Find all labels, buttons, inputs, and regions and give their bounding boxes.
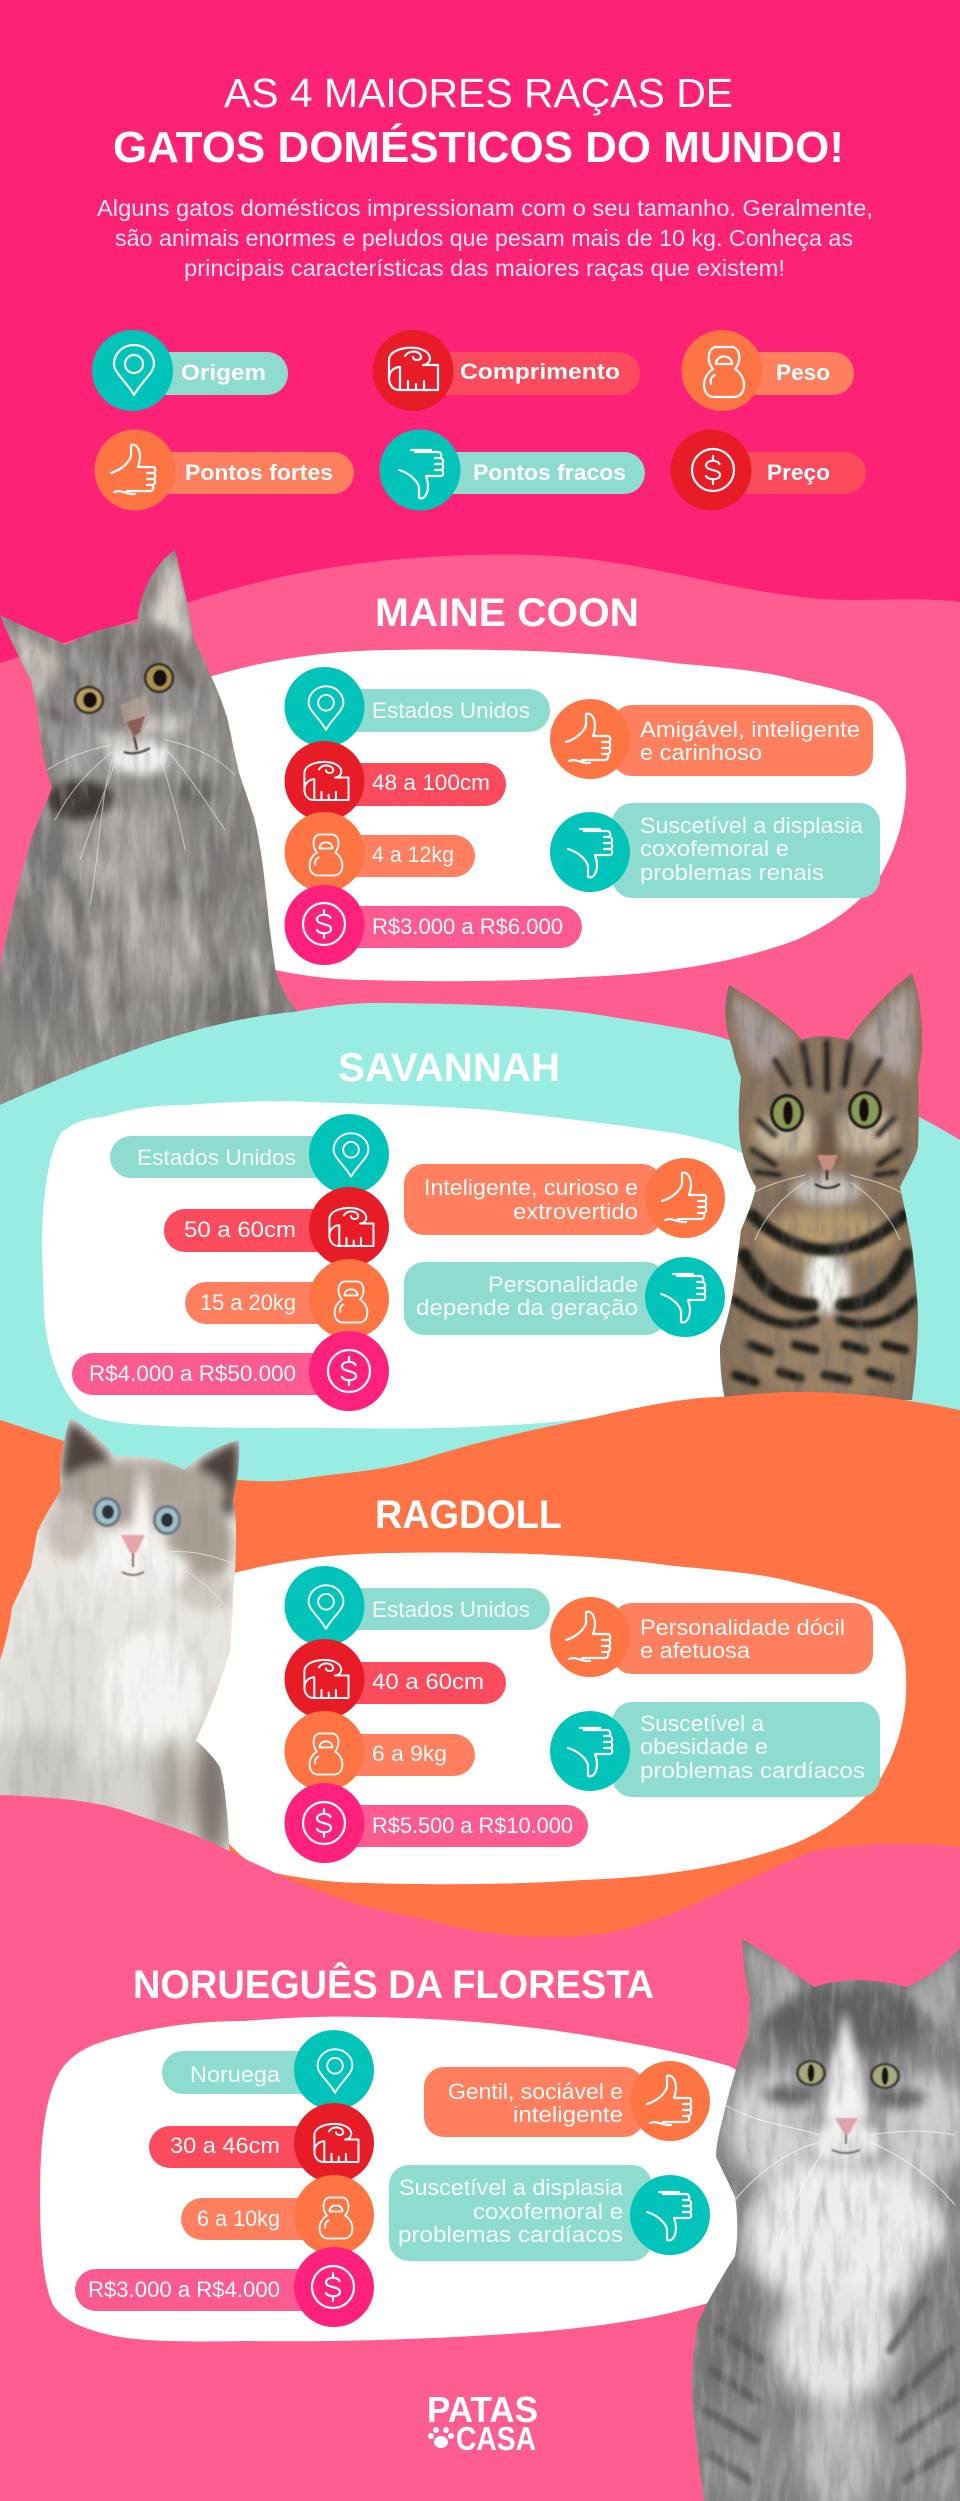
comprimento row: 40 a 60cm xyxy=(372,1669,484,1694)
intro paragraph xyxy=(97,195,873,281)
legend: origem xyxy=(92,330,288,411)
peso row xyxy=(284,812,475,892)
pontos fracos: Suscetível a displasia xyxy=(640,813,864,838)
icon: paw xyxy=(428,2427,454,2448)
white panel: Ragdoll xyxy=(190,1553,906,1884)
pontos fracos xyxy=(389,2165,710,2261)
pontos fracos: coxofemoral e xyxy=(640,836,789,861)
legend: comprimento xyxy=(372,330,640,411)
panel content: Norueguês da Floresta xyxy=(75,1961,710,2327)
title xyxy=(113,70,844,172)
pontos fracos: problemas cardíacos xyxy=(398,2222,623,2247)
logo: Patas da Casa: PATAS xyxy=(427,2389,538,2430)
legend: origem: Origem xyxy=(181,360,266,385)
white panel: Savannah xyxy=(42,1101,793,1428)
pontos fortes: Amigável, inteligente xyxy=(640,717,860,742)
intro paragraph: principais características das maiores raças que existem! xyxy=(184,255,785,281)
peso row xyxy=(185,1259,389,1339)
pontos fortes: e carinhoso xyxy=(640,740,762,765)
comprimento row xyxy=(284,1639,506,1719)
pontos fracos: Suscetível a xyxy=(640,1711,765,1736)
pontos fortes xyxy=(424,2061,710,2141)
background wave: Maine Coon section xyxy=(0,555,960,1200)
pontos fortes xyxy=(550,699,873,779)
photo: Savannah cat xyxy=(720,973,922,1400)
origem row: Noruega xyxy=(190,2062,281,2087)
comprimento row xyxy=(164,1187,389,1267)
legend: pontos fracos: Pontos fracos xyxy=(473,460,626,485)
heading: Maine Coon: MAINE COON xyxy=(375,591,639,635)
heading: Norueguês da Floresta: NORUEGUÊS DA FLORESTA xyxy=(133,1961,654,2007)
comprimento row xyxy=(149,2103,374,2183)
title: AS 4 MAIORES RAÇAS DE xyxy=(224,70,733,116)
panel content: Savannah xyxy=(72,1046,725,1411)
preço row: R$3.000 a R$4.000 xyxy=(88,2277,280,2302)
preço row xyxy=(72,1331,389,1411)
legend: preço: Preço xyxy=(767,460,830,485)
preço row: R$5.500 a R$10.000 xyxy=(372,1813,573,1838)
origem row xyxy=(284,667,550,747)
heading: Savannah: SAVANNAH xyxy=(338,1046,560,1090)
comprimento row: 50 a 60cm xyxy=(184,1217,296,1242)
preço row: R$3.000 a R$6.000 xyxy=(372,914,563,939)
pontos fracos: problemas cardíacos xyxy=(640,1758,865,1783)
background wave: Ragdoll section xyxy=(0,1392,960,2000)
comprimento row: 48 a 100cm xyxy=(372,770,490,795)
pontos fracos: depende da geração xyxy=(416,1295,638,1320)
pontos fortes: e afetuosa xyxy=(640,1638,751,1663)
pontos fracos: obesidade e xyxy=(640,1734,768,1759)
origem row xyxy=(284,1566,550,1646)
pontos fortes xyxy=(404,1158,725,1238)
origem row: Estados Unidos xyxy=(372,1597,530,1622)
logo: Patas da Casa xyxy=(427,2389,538,2457)
intro paragraph: são animais enormes e peludos que pesam mais de 10 kg. Conheça as xyxy=(115,225,853,251)
pontos fracos: Suscetível a displasia xyxy=(399,2175,624,2200)
comprimento row: 30 a 46cm xyxy=(170,2133,280,2158)
panel content: Ragdoll xyxy=(284,1493,880,1863)
peso row: 6 a 9kg xyxy=(372,1741,447,1766)
legend: comprimento: Comprimento xyxy=(460,359,620,384)
legend: pontos fracos xyxy=(380,430,645,510)
photo: Norwegian forest cat xyxy=(685,1930,960,2501)
legend: peso: Peso xyxy=(776,360,830,385)
heading: Ragdoll: RAGDOLL xyxy=(375,1493,562,1537)
pontos fracos xyxy=(550,803,880,898)
photo: Ragdoll cat xyxy=(0,1410,245,1865)
white panel: Norueguês da Floresta xyxy=(40,2017,792,2341)
title: GATOS DOMÉSTICOS DO MUNDO! xyxy=(113,122,844,172)
legend: peso xyxy=(682,330,854,411)
peso row: 4 a 12kg xyxy=(372,842,454,867)
preço row xyxy=(75,2247,374,2327)
background wave: Savannah section xyxy=(0,1003,960,1600)
preço row xyxy=(284,885,582,965)
intro paragraph: Alguns gatos domésticos impressionam com o seu tamanho. Geralmente, xyxy=(97,195,873,221)
pontos fortes xyxy=(550,1597,873,1677)
pontos fortes: Inteligente, curioso e xyxy=(424,1175,638,1200)
preço row xyxy=(284,1783,588,1863)
pontos fortes: Gentil, sociável e xyxy=(448,2079,623,2104)
legend xyxy=(92,330,866,510)
panel content: Maine Coon xyxy=(284,591,880,965)
logo: Patas da Casa: CASA xyxy=(456,2420,536,2457)
origem row: Estados Unidos xyxy=(372,698,530,723)
legend: pontos fortes xyxy=(94,430,354,510)
pontos fortes: Personalidade dócil xyxy=(640,1615,845,1640)
photo: Maine Coon cat xyxy=(0,540,310,1130)
pontos fracos xyxy=(550,1702,880,1797)
preço row: R$4.000 a R$50.000 xyxy=(89,1361,296,1386)
peso row xyxy=(284,1711,475,1791)
background wave: Norueguês da Floresta section xyxy=(0,1795,960,2501)
pontos fracos: Personalidade xyxy=(488,1272,638,1297)
origem row: Estados Unidos xyxy=(137,1145,296,1170)
legend: preço xyxy=(670,430,866,510)
white panel: Maine Coon xyxy=(190,650,906,981)
peso row xyxy=(181,2175,374,2255)
origem row xyxy=(110,1114,389,1194)
pontos fracos: problemas renais xyxy=(640,860,824,885)
pontos fracos: coxofemoral e xyxy=(473,2199,623,2224)
pontos fortes: extrovertido xyxy=(513,1199,638,1224)
origem row xyxy=(162,2030,374,2110)
pontos fortes: inteligente xyxy=(513,2102,623,2127)
comprimento row xyxy=(284,741,506,821)
peso row: 6 a 10kg xyxy=(197,2206,280,2231)
pontos fracos xyxy=(404,1257,725,1337)
peso row: 15 a 20kg xyxy=(200,1290,296,1315)
legend: pontos fortes: Pontos fortes xyxy=(185,460,333,485)
